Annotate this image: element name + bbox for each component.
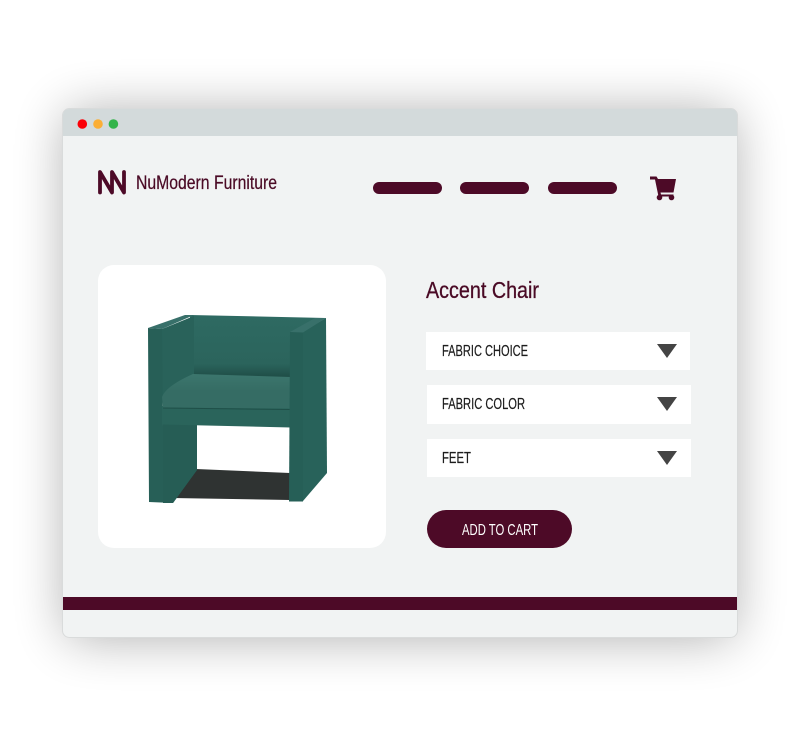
seat rail bbox=[162, 406, 291, 428]
dropdown: feet: FEET bbox=[442, 450, 471, 467]
icon: shopping cart bbox=[650, 176, 676, 200]
window control dots bbox=[78, 119, 118, 129]
browser title bar bbox=[63, 109, 737, 136]
dropdown: feet bbox=[427, 439, 691, 477]
back rest bbox=[190, 315, 326, 380]
window drop shadow bbox=[66, 112, 734, 638]
brand name: NuModern Furniture bbox=[136, 173, 277, 194]
browser window bbox=[62, 108, 738, 638]
product title: Accent Chair bbox=[426, 277, 539, 303]
left arm top bbox=[148, 315, 194, 329]
left arm inner bbox=[162, 316, 194, 398]
cushion seam bbox=[163, 408, 290, 410]
product image card bbox=[98, 265, 386, 548]
right arm side bbox=[302, 318, 327, 501]
left arm front and leg bbox=[148, 328, 197, 503]
seat cushion bbox=[162, 374, 291, 408]
dropdown: fabric color: FABRIC COLOR bbox=[442, 396, 525, 413]
logo mark bbox=[100, 172, 124, 192]
dropdown: fabric choice bbox=[426, 332, 690, 370]
chair illustration bbox=[148, 315, 327, 503]
left leg inner face bbox=[163, 424, 197, 503]
dropdown: fabric color bbox=[427, 385, 691, 424]
right arm front bbox=[289, 332, 303, 502]
navigation placeholders bbox=[373, 182, 617, 194]
footer bar bbox=[63, 597, 737, 610]
logo bbox=[100, 172, 277, 194]
floor shadow bbox=[172, 469, 290, 500]
add to cart button: ADD TO CART bbox=[462, 522, 538, 539]
right arm top bbox=[290, 318, 326, 332]
add to cart button bbox=[427, 510, 572, 548]
dropdown: fabric choice: FABRIC CHOICE bbox=[442, 343, 528, 360]
